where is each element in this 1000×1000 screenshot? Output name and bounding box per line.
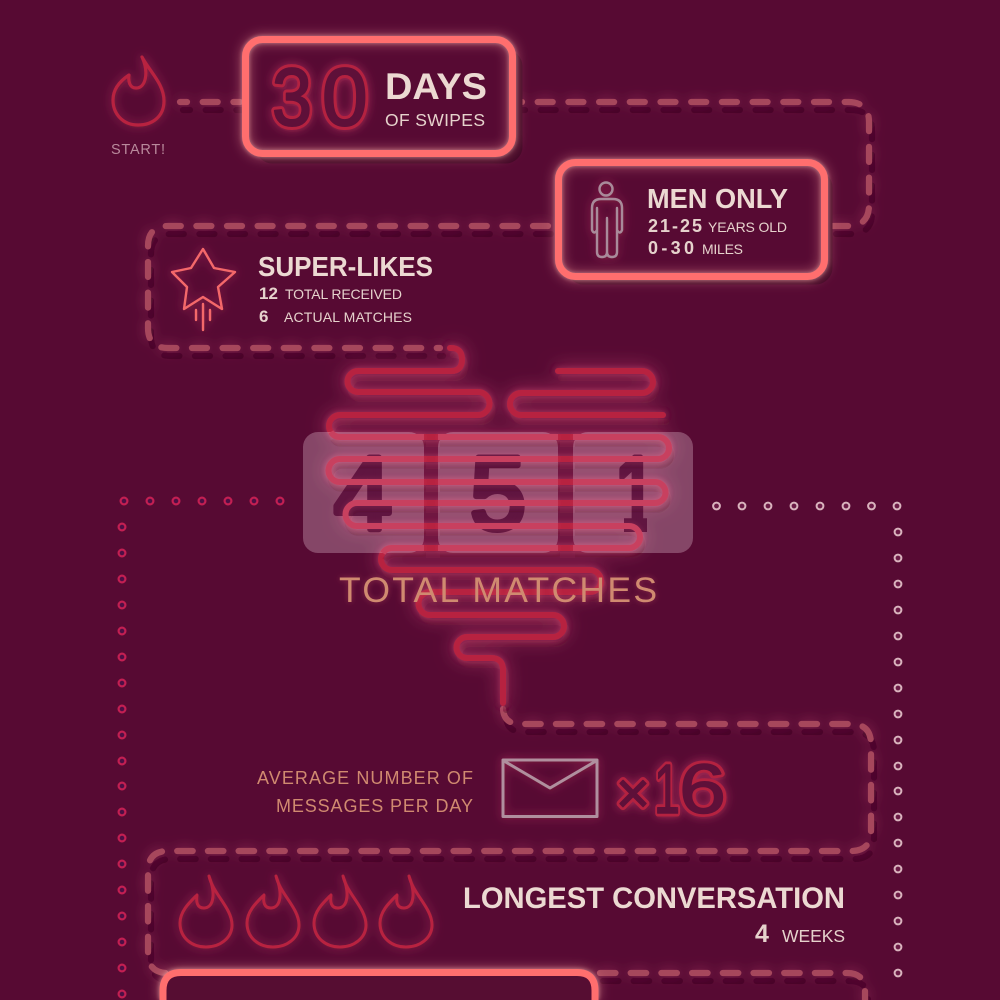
times 16: 6 [679,750,726,828]
panel: 30 days of swipes [246,40,522,164]
total matches number 451 [333,454,647,533]
icon: four flames [180,876,432,947]
total matches number 451: 4 [334,436,392,552]
big number 30: 3 [272,52,312,143]
big number 30 [272,52,368,143]
heart line segments across tiles [328,432,669,553]
of swipes: OF SWIPES [385,110,485,130]
panel: super-likes [172,249,433,330]
big number 30: 0 [322,52,368,143]
times 16: 1 [654,750,680,828]
times 16: 1 [654,750,680,828]
age range [648,216,787,236]
icon: start flame [113,57,164,125]
longest conversation heading: LONGEST CONVERSATION [463,882,845,915]
number tiles backing [303,432,693,553]
dashed route: final segment [600,973,865,1000]
actual matches: 6 [259,307,268,326]
total received: 12 [259,284,278,303]
icon: shooting star [172,249,235,330]
panel: bottom box [163,972,595,1000]
days heading: DAYS [385,66,487,107]
men only heading: MEN ONLY [647,183,788,214]
dashed route: heart to longest conversation [148,709,871,973]
actual matches: ACTUAL MATCHES [284,309,412,325]
neon heart line [328,348,669,703]
distance: 0-30 [648,238,694,258]
total matches number 451: 5 [470,436,526,552]
start label: START! [111,142,165,158]
dashed route: start to men only [180,102,869,226]
duration: 4 [755,920,769,948]
icon: person [592,182,622,257]
panel: longest conversation [180,876,845,948]
panel: men only [558,162,832,284]
total received: TOTAL RECEIVED [285,286,402,302]
dashed route: men only to super-likes [148,226,548,348]
message label [257,768,473,816]
times 16: 6 [679,750,726,828]
big number 30: 3 [272,52,312,143]
message label: AVERAGE NUMBER OF [257,768,473,788]
duration: WEEKS [782,926,845,946]
times 16 [616,750,726,828]
age range: 21-25 [648,216,702,236]
icon: envelope [503,760,597,816]
panel: messages per day [257,750,726,828]
total matches label: TOTAL MATCHES [339,570,657,610]
total matches number 451: 1 [614,436,658,552]
distance: MILES [702,241,743,257]
total received [259,284,402,303]
dotted border: left (pink rings) [119,498,283,997]
times 16: × [616,761,650,826]
age range: YEARS OLD [708,219,787,235]
message label: MESSAGES PER DAY [276,796,473,816]
super-likes heading: SUPER-LIKES [258,251,433,282]
big number 30: 0 [322,52,368,143]
times 16: × [616,761,650,826]
dotted border: right (pale rings) [713,503,901,976]
duration [755,920,845,948]
distance [648,238,743,258]
